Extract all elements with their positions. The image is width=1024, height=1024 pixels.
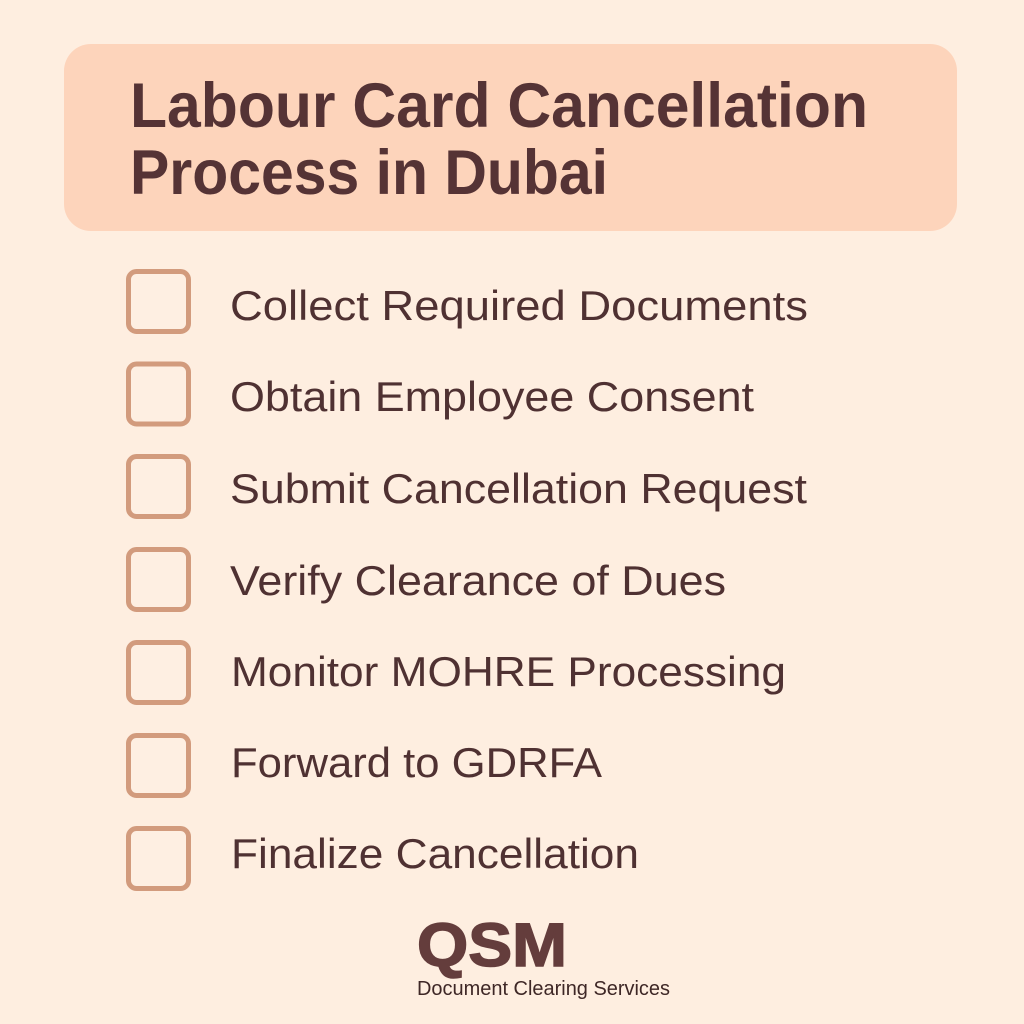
title <box>130 71 868 208</box>
item 4: Verify Clearance of Dues <box>128 550 726 610</box>
item 1: Collect Required Documents: Collect Required Documents <box>230 282 808 329</box>
item 2: Obtain Employee Consent <box>128 364 754 424</box>
item 3: Submit Cancellation Request <box>128 456 807 516</box>
item 4: Verify Clearance of Dues: Verify Clearance of Dues <box>230 557 726 604</box>
item 1: Collect Required Documents <box>128 272 808 332</box>
item 3: Submit Cancellation Request: Submit Cancellation Request <box>230 465 807 512</box>
panel: title banner <box>64 44 957 231</box>
item 2: Obtain Employee Consent: Obtain Employee Consent <box>230 373 754 420</box>
logo: QSM Document Clearing Services: QSM <box>417 911 567 979</box>
item 5: Monitor MOHRE Processing: Monitor MOHRE Processing <box>231 648 786 695</box>
item 7: Finalize Cancellation <box>128 828 639 888</box>
item 7: Finalize Cancellation: Finalize Cancellation <box>231 830 639 877</box>
logo: QSM Document Clearing Services <box>417 911 670 1000</box>
item 5: Monitor MOHRE Processing <box>128 642 786 702</box>
title: Labour Card Cancellation <box>130 71 868 141</box>
item 6: Forward to GDRFA: Forward to GDRFA <box>231 739 602 786</box>
logo: QSM Document Clearing Services: Document Clearing Services <box>417 978 670 1000</box>
title: Process in Dubai <box>130 138 608 208</box>
item 6: Forward to GDRFA <box>128 736 602 796</box>
checklist <box>128 272 808 888</box>
